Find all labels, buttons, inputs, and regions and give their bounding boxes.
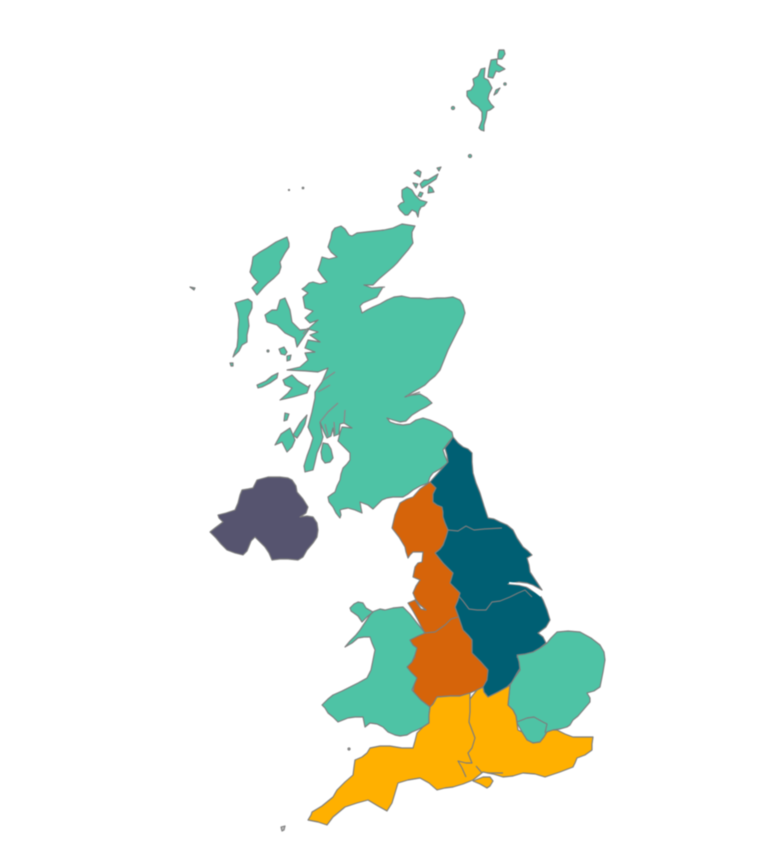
boundary between South West and South East <box>458 698 475 777</box>
islands: Orkney <box>398 167 441 217</box>
island: Isle of Wight <box>473 777 493 788</box>
West Midlands boundary <box>424 617 458 633</box>
island: Arran <box>321 443 333 463</box>
region: South West and South East <box>308 685 593 825</box>
sea lochs of western Scotland <box>303 287 420 436</box>
island: Jura <box>293 415 307 438</box>
islands: Shetland <box>451 50 506 158</box>
island: Lewis and Harris <box>250 237 289 295</box>
island: Colonsay <box>284 413 289 421</box>
island: Islay <box>275 428 295 452</box>
region: North East, Yorkshire, East Midlands <box>430 437 550 697</box>
islands: small outliers <box>190 187 304 366</box>
region: North West and West Midlands <box>392 482 488 707</box>
islands: Lundy and Scilly <box>281 748 350 831</box>
island: Skye <box>265 298 309 347</box>
London boundary <box>517 717 547 733</box>
island: Eigg <box>287 355 291 361</box>
region: East of England <box>508 631 605 743</box>
island: Rum <box>279 347 287 355</box>
island: Tiree and Coll <box>257 373 278 388</box>
boundaries and Humber estuary <box>448 526 541 610</box>
region: Scotland <box>190 50 506 518</box>
island: Anglesey <box>350 602 373 622</box>
Solent inlet <box>476 766 503 773</box>
island: Uists <box>233 299 252 357</box>
region: Wales <box>322 602 430 736</box>
region: Northern Ireland <box>210 477 318 560</box>
island: Mull <box>280 375 310 400</box>
